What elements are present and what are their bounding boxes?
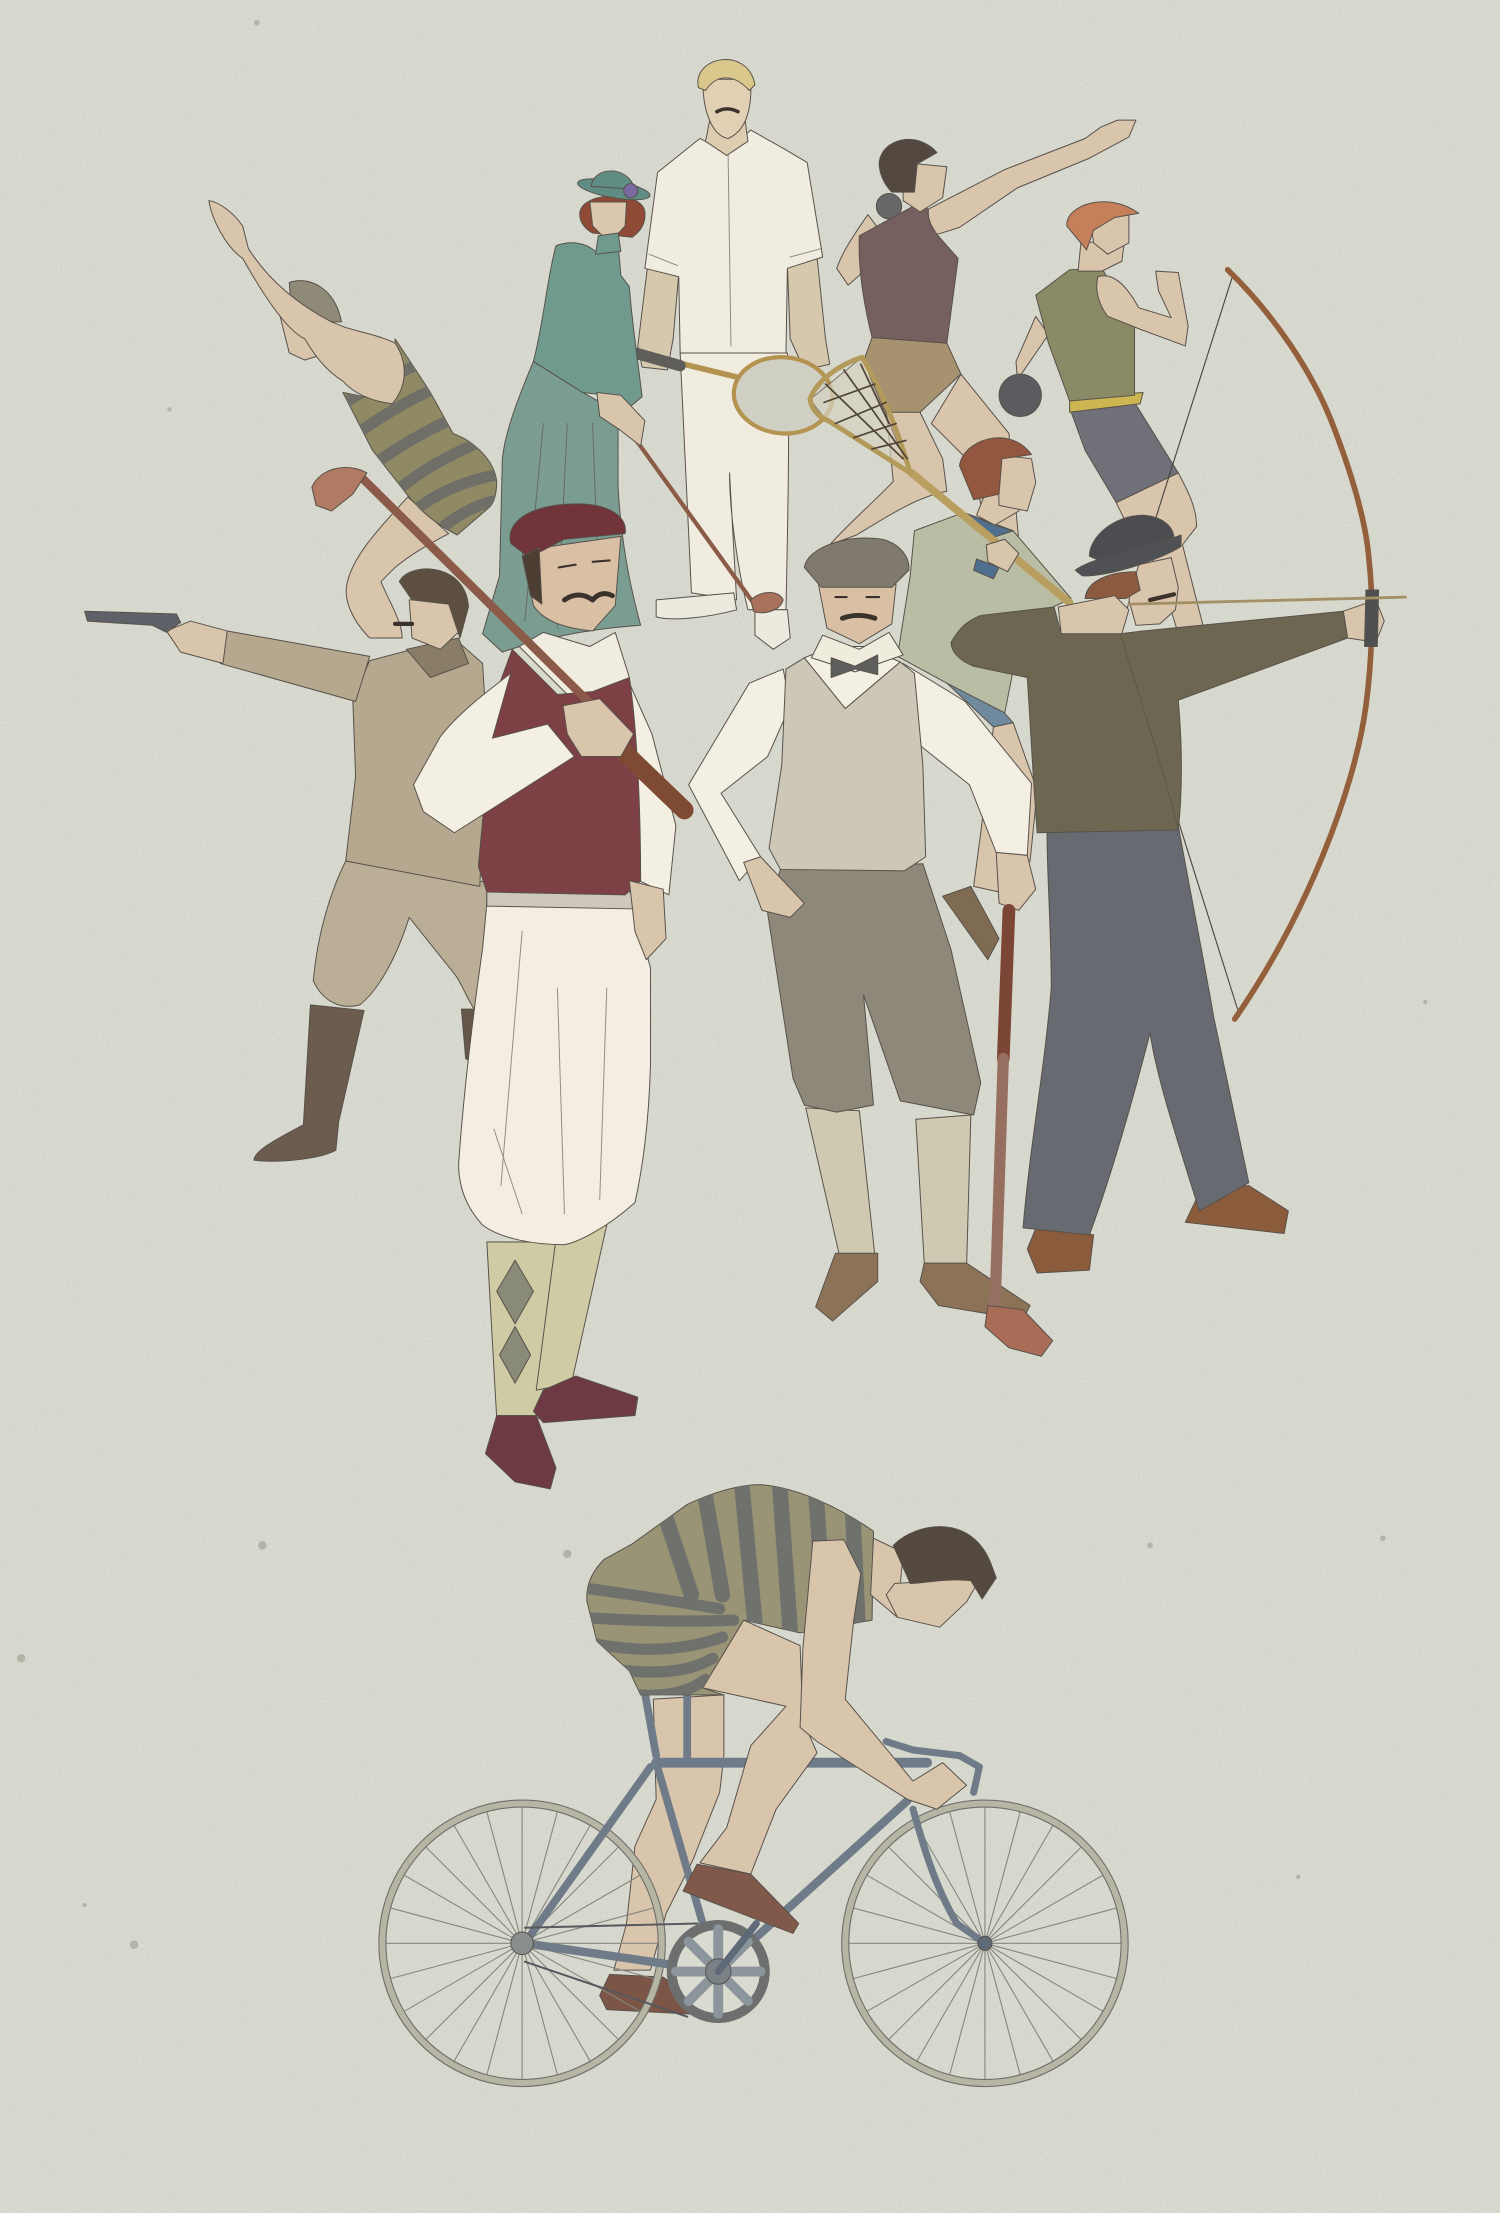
icon: golf club over shoulder [312, 467, 684, 810]
figure: top athlete raising arm [830, 120, 1136, 545]
icon: tennis racket [635, 353, 836, 438]
icon: bow [1120, 270, 1372, 1019]
chainring [672, 1924, 765, 2018]
figure: tennis player in white [635, 60, 836, 649]
rear wheel [379, 1800, 665, 2087]
figure: golfer in maroon vest [312, 467, 684, 1489]
figure: pistol shooter in khaki [85, 569, 487, 1161]
figure: woman in green dress [483, 171, 783, 652]
frame [525, 1685, 985, 2017]
figure: cyclist on bicycle [379, 1475, 1128, 2087]
figure: archer [951, 270, 1405, 1273]
icon: pistol [85, 611, 181, 632]
front wheel [842, 1800, 1128, 2087]
icon: woman's golf club [618, 415, 783, 613]
bicycle [379, 1685, 1128, 2087]
figure: red-haired athlete with discus [999, 202, 1205, 634]
figure: diver [209, 201, 500, 638]
figure: boy with lacrosse stick [810, 357, 1071, 960]
cyclist body [581, 1475, 996, 1933]
figure: man in beige vest [689, 538, 1053, 1356]
icon: arrow [1129, 597, 1405, 604]
icon: golf club [985, 910, 1053, 1356]
icon: lacrosse stick [810, 357, 1070, 603]
